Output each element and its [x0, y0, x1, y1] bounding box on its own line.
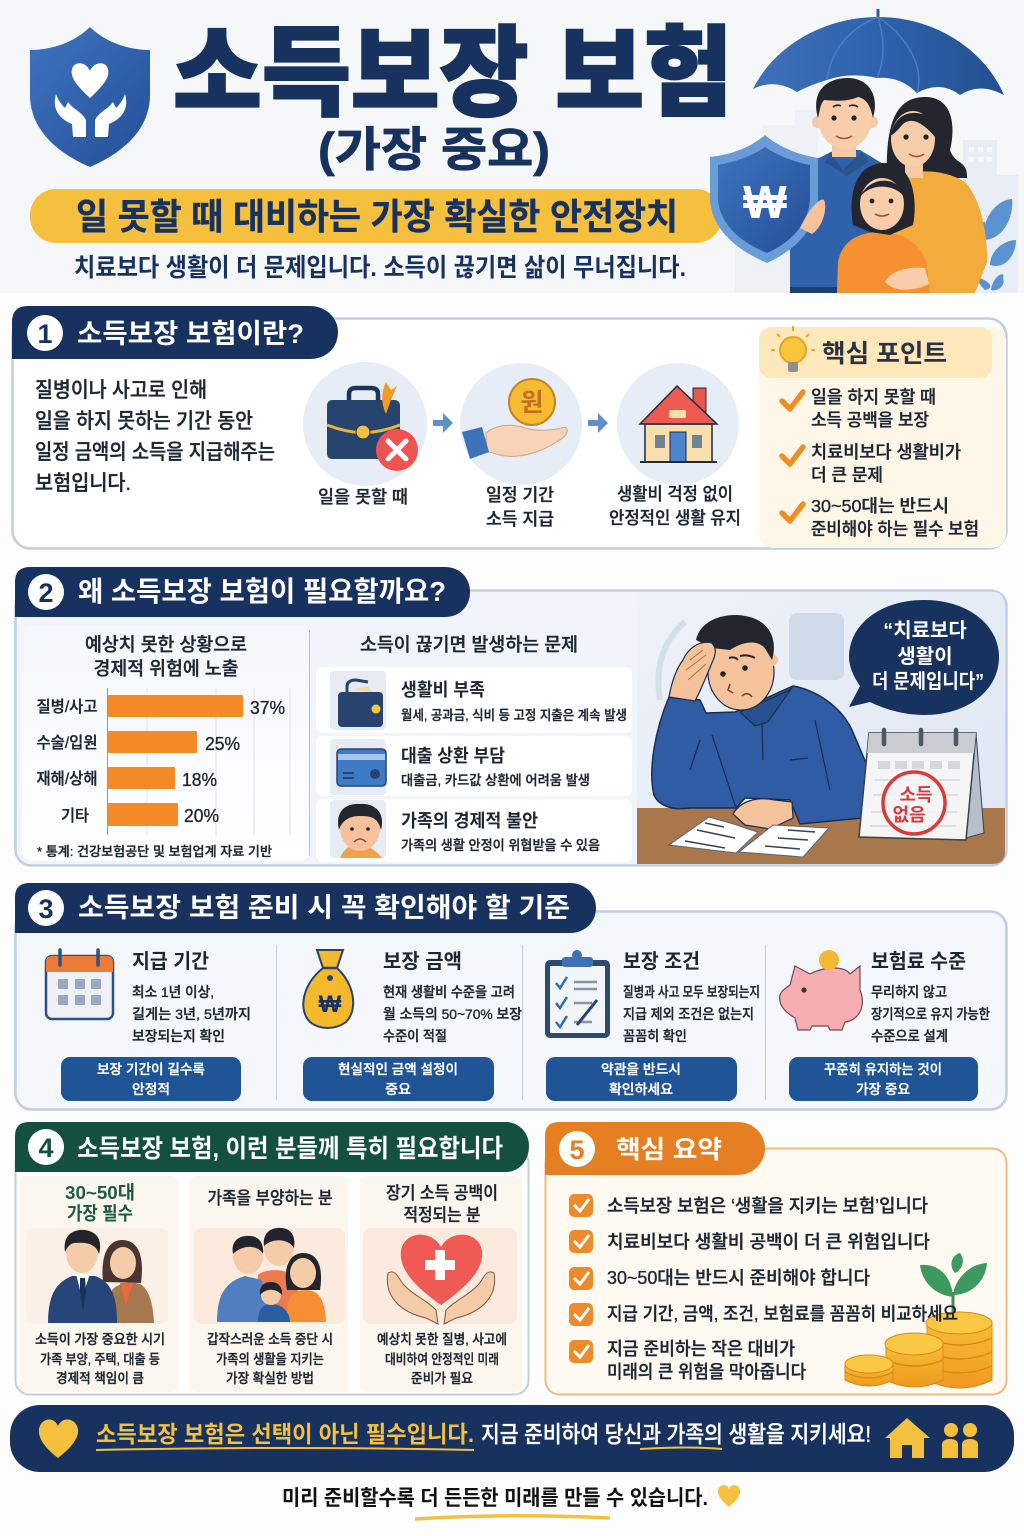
man	[790, 150, 900, 293]
key point text: 더 큰 문제	[811, 465, 883, 485]
section 5 heading tab: 핵심 요약	[616, 1136, 722, 1164]
note button: 보장 기간이 길수록	[97, 1062, 205, 1077]
item 3: 30~50대는 반드시 준비해야 합니다	[607, 1268, 870, 1288]
key point text: 치료비보다 생활비가	[811, 442, 961, 462]
icon: calendar with stamp: 없음	[892, 805, 926, 825]
criterion: payment period: 최소 1년 이상,	[132, 984, 214, 1000]
section 4 heading tab	[15, 1122, 529, 1172]
definition text	[35, 379, 275, 495]
footnote: * 통계: 건강보험공단 및 보험업계 자료 기반	[37, 844, 272, 859]
banner message: 지금 준비하여 당신과 가족의 생활을 지키세요!	[481, 1421, 871, 1447]
note button	[546, 1057, 737, 1101]
step 2: hand with coin	[460, 363, 582, 529]
icon: piggy bank	[780, 950, 862, 1030]
callout: speech bubble: “치료보다	[883, 619, 967, 642]
definition text: 질병이나 사고로 인해	[35, 379, 207, 402]
summary check list	[569, 1194, 958, 1382]
note button	[61, 1057, 241, 1101]
bar: 기타 20%: 20%	[184, 806, 219, 826]
card: ages 30-50: 경제적 책임이 큼	[56, 1371, 144, 1386]
criterion: coverage amount	[303, 950, 522, 1101]
illustration: worried man at desk	[637, 592, 1005, 864]
illustration: coins and sprout	[845, 1253, 992, 1388]
problem card: loan repayment	[316, 736, 632, 796]
card: long income gap: 예상치 못한 질병, 사고에	[377, 1332, 507, 1347]
step 1: briefcase with X: 일을 못할 때	[318, 487, 408, 507]
callout: speech bubble: 더 문제입니다”	[872, 670, 984, 693]
arrow	[433, 413, 453, 433]
section 3 heading tab	[15, 883, 596, 933]
icon: check marks	[782, 392, 803, 521]
definition text: 일을 하지 못하는 기간 동안	[35, 410, 253, 433]
criterion: payment period: 보장되는지 확인	[132, 1028, 225, 1044]
woman arm and hand	[925, 232, 985, 282]
raised hand	[669, 642, 715, 701]
closing message	[282, 1487, 708, 1519]
hand on paper	[733, 799, 793, 829]
criterion: coverage conditions: 질병과 사고 모두 보장되는지	[623, 984, 760, 1000]
criterion: premium level: 수준으로 설계	[871, 1028, 948, 1044]
arrow	[588, 413, 608, 433]
papers	[669, 817, 829, 857]
panel: section 3 criteria	[15, 883, 1006, 1110]
criterion: premium level: 무리하지 않고	[871, 984, 947, 1000]
bar: 재해/상해 18%: 18%	[182, 770, 217, 790]
problem card: living cost shortage: 생활비 부족	[401, 680, 485, 700]
card: long income gap: 대비하여 안정적인 미래	[385, 1352, 499, 1367]
definition text: 보험입니다.	[35, 472, 131, 495]
section 2 heading tab	[15, 567, 470, 617]
note button: 확인하세요	[609, 1082, 673, 1097]
card: family supporters: 가장 확실한 방법	[226, 1371, 314, 1386]
criterion: premium level: 장기적으로 유지 가능한	[871, 1006, 990, 1022]
problem card: loan repayment: 대출 상환 부담	[401, 746, 505, 766]
item 4: 지급 기간, 금액, 조건, 보험료를 꼼꼼히 비교하세요	[607, 1304, 958, 1324]
note button: 가장 중요	[856, 1082, 910, 1097]
illustration: family under umbrella with shield	[710, 9, 1018, 293]
chart title: 예상치 못한 상황으로	[85, 634, 247, 655]
card: family supporters: 갑작스러운 소득 중단 시	[207, 1332, 333, 1347]
left block: bar chart	[22, 625, 310, 861]
illustration: heart in hands	[363, 1228, 517, 1324]
step 3: house: 생활비 걱정 없이	[617, 484, 733, 504]
header	[30, 9, 1018, 293]
icon: money bag	[303, 950, 353, 1028]
note button: 약관을 반드시	[601, 1062, 681, 1077]
icon: family	[942, 1423, 978, 1458]
panel: key points: 핵심 포인트	[822, 340, 947, 368]
criterion: premium level	[780, 950, 990, 1101]
criterion: coverage conditions	[545, 950, 760, 1101]
note button	[789, 1057, 978, 1101]
step 2: hand with coin: 일정 기간	[486, 485, 554, 505]
seated body	[652, 686, 866, 824]
criterion: coverage conditions: 지급 제외 조건은 없는지	[623, 1006, 754, 1022]
card: ages 30-50	[20, 1176, 178, 1392]
card: long income gap: 준비가 필요	[411, 1371, 473, 1386]
woman	[887, 97, 967, 180]
problem card: family anxiety	[316, 799, 632, 862]
card: family supporters: 가족을 부양하는 분	[208, 1188, 332, 1208]
panel: section 1 what is income protection	[12, 306, 1006, 548]
problems block heading: 소득이 끊기면 발생하는 문제	[360, 634, 578, 655]
icon: yellow heart	[39, 1420, 78, 1458]
item 1: 소득보장 보험은 ‘생활을 지키는 보험’입니다	[607, 1196, 928, 1216]
item 5: 미래의 큰 위험을 막아줍니다	[607, 1362, 806, 1382]
card: ages 30-50: 가족 부양, 주택, 대출 등	[40, 1352, 160, 1367]
icon: shield with heart and hands	[30, 27, 150, 167]
key point text: 준비해야 하는 필수 보험	[811, 519, 979, 539]
card: family supporters	[190, 1176, 348, 1392]
tagline sentence: 치료보다 생활이 더 문제입니다. 소득이 끊기면 삶이 무너집니다.	[74, 254, 686, 282]
problem card: living cost shortage: 월세, 공과금, 식비 등 고정 지출은 계속 발생	[401, 707, 627, 723]
panel: key points	[759, 326, 1006, 548]
footer banner	[10, 1405, 1014, 1472]
title: 소득보장 보험	[173, 18, 733, 128]
criterion: coverage conditions: 보장 조건	[623, 950, 700, 973]
problem card: loan repayment: 대출금, 카드값 상환에 어려움 발생	[401, 773, 590, 788]
girl	[837, 232, 930, 293]
bar: 재해/상해 18%	[36, 767, 217, 790]
card: ages 30-50: 가장 필수	[67, 1203, 133, 1224]
illustration: family under umbrella with shield: ₩	[743, 176, 787, 228]
card: long income gap: 적정되는 분	[404, 1205, 480, 1225]
criterion: coverage amount: 월 소득의 50~70% 보장	[383, 1006, 522, 1022]
criterion: coverage conditions: 꼼꼼히 확인	[623, 1028, 687, 1044]
item 5: 지금 준비하는 작은 대비가	[607, 1339, 795, 1359]
section 5 heading tab	[545, 1122, 765, 1175]
key point text: 일을 하지 못할 때	[811, 387, 936, 407]
criterion: payment period: 지급 기간	[132, 950, 209, 973]
step 2: hand with coin: 원	[520, 389, 544, 417]
icon: clipboard checklist	[545, 950, 610, 1038]
bar: 질병/사고 37%	[36, 695, 285, 718]
note button: 안정적	[132, 1082, 170, 1097]
card: ages 30-50: 소득이 가장 중요한 시기	[35, 1332, 165, 1347]
criterion: coverage amount: 수준이 적절	[383, 1028, 447, 1044]
section 3 heading tab: 소득보장 보험 준비 시 꼭 확인해야 할 기준	[78, 893, 570, 923]
bar: 질병/사고 37%: 37%	[250, 698, 285, 718]
bar: 기타 20%: 기타	[61, 807, 89, 825]
section 3 heading tab: 3	[38, 894, 54, 924]
card: ages 30-50: 30~50대	[65, 1182, 135, 1203]
definition text: 일정 금액의 소득을 지급해주는	[35, 441, 275, 464]
criterion: coverage amount: 현재 생활비 수준을 고려	[383, 984, 515, 1000]
yellow tagline pill: 일 못할 때 대비하는 가장 확실한 안전장치	[76, 196, 678, 237]
step 1: briefcase with X	[303, 362, 427, 507]
section 2 heading tab: 왜 소득보장 보험이 필요할까요?	[78, 576, 446, 607]
icon: house	[885, 1418, 930, 1458]
section 2 heading tab: 2	[38, 578, 54, 608]
head	[708, 634, 774, 710]
note button: 꾸준히 유지하는 것이	[824, 1062, 942, 1077]
step 2: hand with coin: 소득 지급	[486, 509, 554, 529]
icon: calendar	[46, 950, 113, 1019]
bar: 기타 20%	[61, 803, 219, 826]
icon: closing heart	[718, 1485, 740, 1507]
criterion: payment period	[46, 950, 251, 1101]
bar: 수술/입원 25%	[36, 731, 240, 754]
closing message: 미리 준비할수록 더 든든한 미래를 만들 수 있습니다.	[282, 1487, 708, 1510]
card: long income gap	[360, 1176, 522, 1392]
shield	[710, 135, 818, 263]
bar: 수술/입원 25%: 25%	[205, 734, 240, 754]
bar: 수술/입원 25%: 수술/입원	[36, 734, 98, 752]
panel: section 5 summary	[545, 1122, 1006, 1394]
card: family supporters: 가족의 생활을 지키는	[216, 1352, 324, 1367]
problem card: living cost shortage	[316, 667, 632, 733]
illustration: family	[194, 1228, 345, 1324]
key point text: 30~50대는 반드시	[811, 496, 949, 516]
step 3: house: 안정적인 생활 유지	[609, 508, 741, 528]
step 3: house	[609, 363, 741, 528]
section 1 heading tab: 소득보장 보험이란?	[77, 319, 304, 349]
section 4 heading tab: 소득보장 보험, 이런 분들께 특히 필요합니다	[77, 1135, 503, 1163]
note button	[303, 1057, 494, 1101]
icon: money bag: ₩	[319, 991, 342, 1018]
chart title line 2: 경제적 위험에 노출	[94, 658, 238, 679]
note button: 중요	[385, 1082, 411, 1097]
key point text	[811, 387, 979, 539]
yellow tagline pill	[30, 189, 722, 243]
subtitle: 가장 중요: (가장 중요)	[318, 123, 550, 176]
panel: section 4 who needs it	[15, 1122, 529, 1394]
icon: calendar with stamp: 소득	[899, 785, 933, 805]
problem card: family anxiety: 가족의 경제적 불안	[401, 811, 538, 831]
item 5	[569, 1339, 806, 1382]
item 2: 치료비보다 생활비 공백이 더 큰 위험입니다	[607, 1232, 930, 1252]
problem card: family anxiety: 가족의 생활 안정이 위협받을 수 있음	[401, 838, 600, 853]
illustration: working couple	[26, 1228, 168, 1324]
bar: 질병/사고 37%: 질병/사고	[36, 698, 98, 716]
section 4 heading tab: 4	[38, 1133, 54, 1163]
icon: calendar with stamp	[859, 730, 984, 840]
criterion: coverage amount: 보장 금액	[383, 950, 462, 973]
callout: speech bubble	[849, 600, 999, 715]
note button: 현실적인 금액 설정이	[338, 1062, 458, 1077]
card: long income gap: 장기 소득 공백이	[386, 1183, 498, 1203]
callout: speech bubble: 생활이	[897, 645, 953, 668]
panel: section 2 why needed	[15, 567, 1006, 866]
section 1 heading tab: 1	[37, 319, 53, 349]
banner highlighted message: 소득보장 보험은 선택이 아닌 필수입니다.	[96, 1421, 474, 1447]
key point text: 소득 공백을 보장	[811, 410, 929, 430]
criterion: premium level: 보험료 수준	[871, 950, 966, 973]
criterion: payment period: 길게는 3년, 5년까지	[132, 1006, 251, 1022]
icon: light bulb	[771, 326, 815, 372]
section 5 heading tab: 5	[569, 1135, 585, 1165]
section 1 heading tab	[12, 306, 338, 359]
bar: 재해/상해 18%: 재해/상해	[36, 770, 98, 788]
